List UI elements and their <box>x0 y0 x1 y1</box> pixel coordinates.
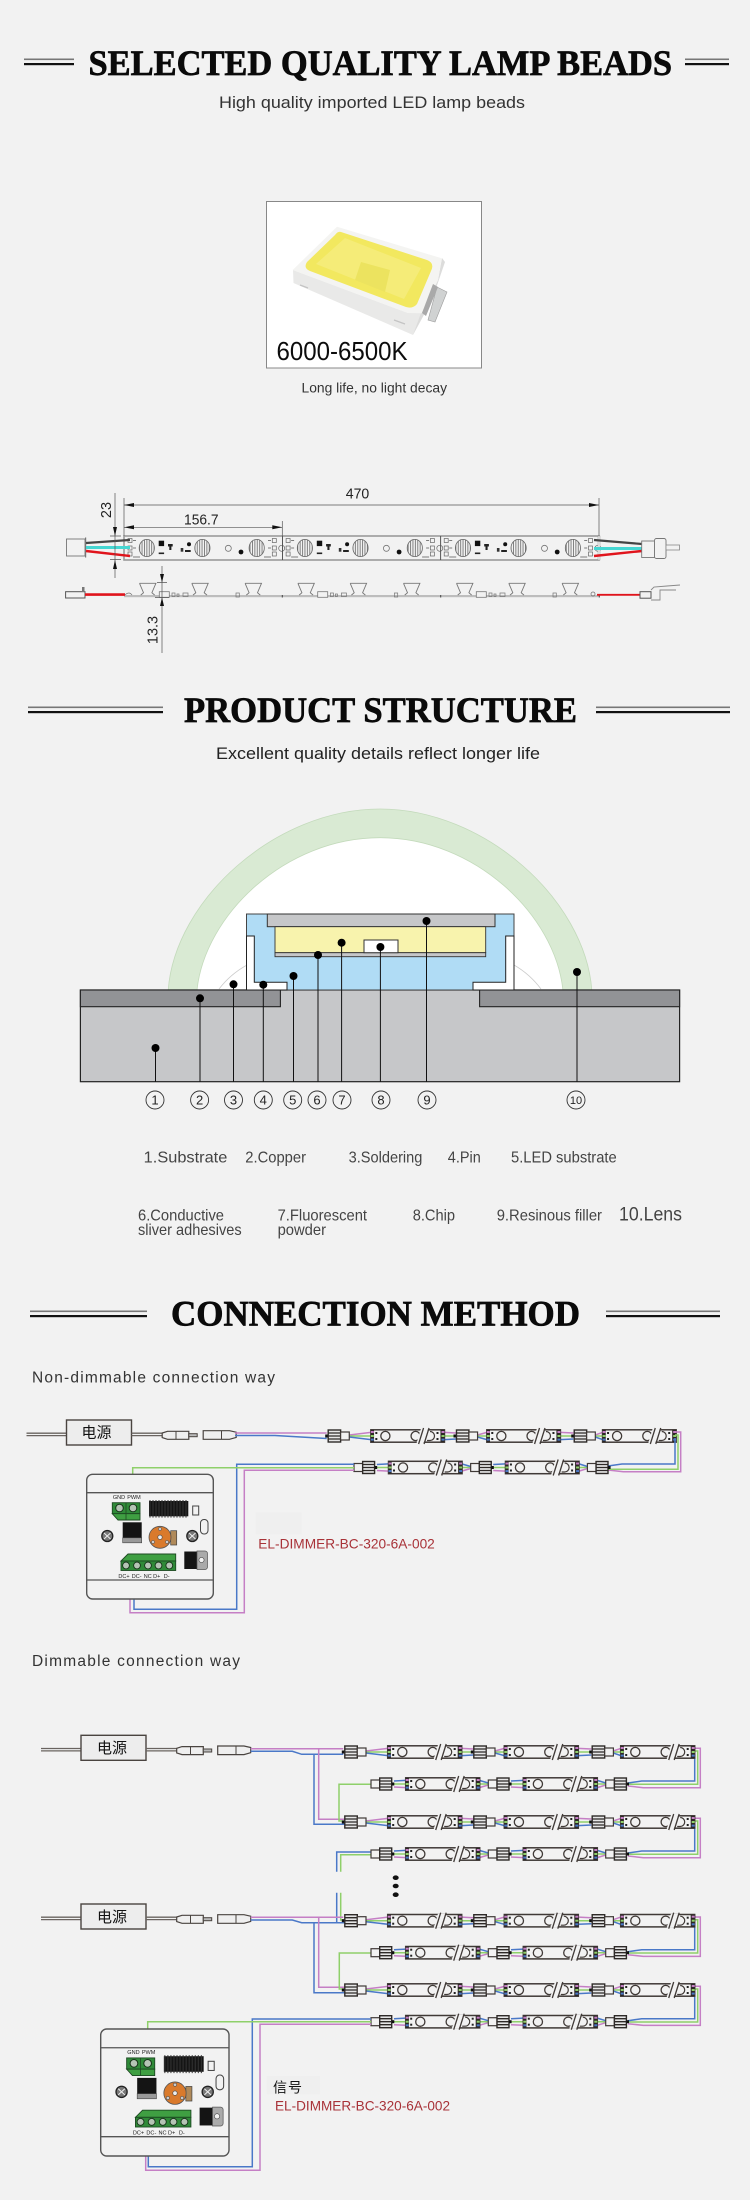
resin filler <box>267 914 495 927</box>
legend: structure parts <box>138 1150 682 1239</box>
fluorescent powder <box>275 927 486 953</box>
controller label: EL-DIMMER-BC-320-6A-002 <box>258 1535 435 1551</box>
section: product structure heading <box>28 690 730 763</box>
controller board: D- <box>179 2131 185 2137</box>
circled part numbers: 2 <box>196 1093 203 1108</box>
solder arc <box>219 965 541 989</box>
power supply 2: 电源 <box>97 1909 127 1926</box>
top view of LED strip <box>66 536 680 560</box>
icon: SMD LED bead <box>293 227 447 335</box>
title: selected quality lamp beads: SELECTED QUALITY LAMP BEADS <box>88 43 672 83</box>
wires from power to first connector <box>235 1433 327 1438</box>
copper layer right <box>480 990 680 1007</box>
controller label <box>256 1512 435 1551</box>
legend: structure parts: 3.Soldering <box>349 1150 422 1167</box>
heading rule left <box>30 1310 147 1317</box>
controller label: 信号 <box>273 2080 302 2096</box>
heading rule left <box>28 706 163 713</box>
heading: dimmable connection way: Dimmable connection way <box>32 1653 240 1670</box>
legend: structure parts: 4.Pin <box>448 1150 481 1167</box>
chart: LED cross-section structure diagram <box>80 809 680 1109</box>
legend: structure parts: 9.Resinous filler <box>497 1208 603 1225</box>
power supply 1 <box>41 1735 251 1760</box>
LED package blue body <box>246 914 514 990</box>
circled part numbers: 5 <box>289 1093 296 1108</box>
controller board: PWM <box>127 1495 141 1501</box>
subtitle: Excellent quality details reflect longer life <box>216 744 540 763</box>
conductive silver adhesive <box>275 953 486 957</box>
power supply with plug: 电源 <box>81 1424 112 1442</box>
power supply 1: 电源 <box>97 1740 127 1757</box>
legend: structure parts: 2.Copper <box>245 1150 307 1167</box>
LED module row 2 <box>354 1460 611 1476</box>
inner air cavity <box>197 838 563 990</box>
legend: structure parts: 10.Lens <box>619 1205 682 1226</box>
controller board: PWM <box>142 2050 156 2056</box>
panel: lamp bead photo card <box>266 202 482 368</box>
controller board: DC- <box>132 1574 142 1580</box>
legend: structure parts: sliver adhesives <box>138 1222 242 1239</box>
dimension: 23: 23 <box>99 502 115 518</box>
label: colour temperature: 6000-6500K <box>276 338 408 366</box>
controller board: DC+ <box>118 1574 130 1580</box>
dimension: 156.7: 156.7 <box>184 512 219 528</box>
controller board <box>101 2029 229 2156</box>
heading rule right <box>606 1310 720 1317</box>
continuation dots <box>393 1875 399 1897</box>
legend: structure parts: 7.Fluorescent <box>278 1208 368 1225</box>
right pin notch <box>473 936 514 990</box>
circled part numbers: 3 <box>230 1093 237 1108</box>
heading rule left <box>24 58 74 65</box>
controller signal wires <box>130 1464 354 1613</box>
controller board: D+ <box>168 2131 175 2137</box>
dimension: 13.3 <box>146 566 169 653</box>
copper layer left <box>80 990 280 1007</box>
circled part numbers: 9 <box>423 1093 431 1108</box>
controller signal wires <box>146 2019 371 2170</box>
circled part numbers: 8 <box>377 1093 385 1108</box>
controller board: DC+ <box>133 2131 144 2137</box>
return loop wiring <box>608 1432 681 1472</box>
controller board: GND <box>127 2050 140 2056</box>
controller label <box>267 2076 450 2113</box>
controller board: D+ <box>153 1574 160 1580</box>
dimension: 23 <box>99 493 121 578</box>
circled part numbers: 10 <box>570 1095 582 1107</box>
return loops <box>628 1748 700 2025</box>
dimension: 470: 470 <box>346 486 369 502</box>
legend: structure parts: powder <box>278 1222 327 1239</box>
subtitle: High quality imported LED lamp beads <box>219 93 525 112</box>
circled part numbers: 4 <box>260 1093 267 1108</box>
circled part numbers: 1 <box>151 1093 159 1108</box>
circled part numbers <box>146 1091 585 1109</box>
power supply 2 <box>41 1904 251 1929</box>
side view of LED strip <box>66 583 680 600</box>
diagram: dimmable wiring <box>41 1735 700 2170</box>
controller board: NC <box>159 2131 167 2137</box>
title: product structure: PRODUCT STRUCTURE <box>184 690 577 730</box>
section: selected quality lamp beads heading <box>24 43 729 112</box>
heading rule right <box>596 706 730 713</box>
lens dome <box>168 809 592 990</box>
supply wiring <box>251 1749 371 1993</box>
power supply with plug <box>26 1420 236 1445</box>
dimension: 13.3: 13.3 <box>146 616 162 644</box>
controller board: GND <box>113 1495 125 1501</box>
left pin notch <box>246 936 287 990</box>
caption: long life: Long life, no light decay <box>302 380 447 396</box>
chip <box>364 940 398 953</box>
dimension: 156.7 <box>124 512 282 536</box>
dimension drawing <box>66 486 680 653</box>
dimension: 470 <box>124 486 599 536</box>
diagram: non-dimmable wiring <box>26 1420 681 1613</box>
section: connection method heading <box>30 1294 720 1334</box>
leader lines and markers <box>152 917 581 1082</box>
title: connection method: CONNECTION METHOD <box>171 1294 580 1334</box>
controller board: D- <box>164 1574 170 1580</box>
controller board <box>87 1474 213 1599</box>
heading rule right <box>685 58 729 65</box>
heading: non-dimmable connection way: Non-dimmable connection way <box>32 1369 275 1386</box>
legend: structure parts: 6.Conductive <box>138 1208 224 1225</box>
legend: structure parts: 1.Substrate <box>144 1150 227 1167</box>
substrate <box>80 990 680 1082</box>
circled part numbers: 7 <box>338 1093 346 1108</box>
circled part numbers: 6 <box>313 1093 321 1108</box>
controller label: EL-DIMMER-BC-320-6A-002 <box>275 2097 450 2113</box>
LED module rows <box>342 1744 695 2030</box>
controller board: NC <box>144 1574 152 1580</box>
controller board: DC- <box>146 2131 156 2137</box>
legend: structure parts: 8.Chip <box>413 1208 455 1225</box>
LED module row 1 <box>325 1428 676 1444</box>
legend: structure parts: 5.LED substrate <box>511 1150 617 1167</box>
